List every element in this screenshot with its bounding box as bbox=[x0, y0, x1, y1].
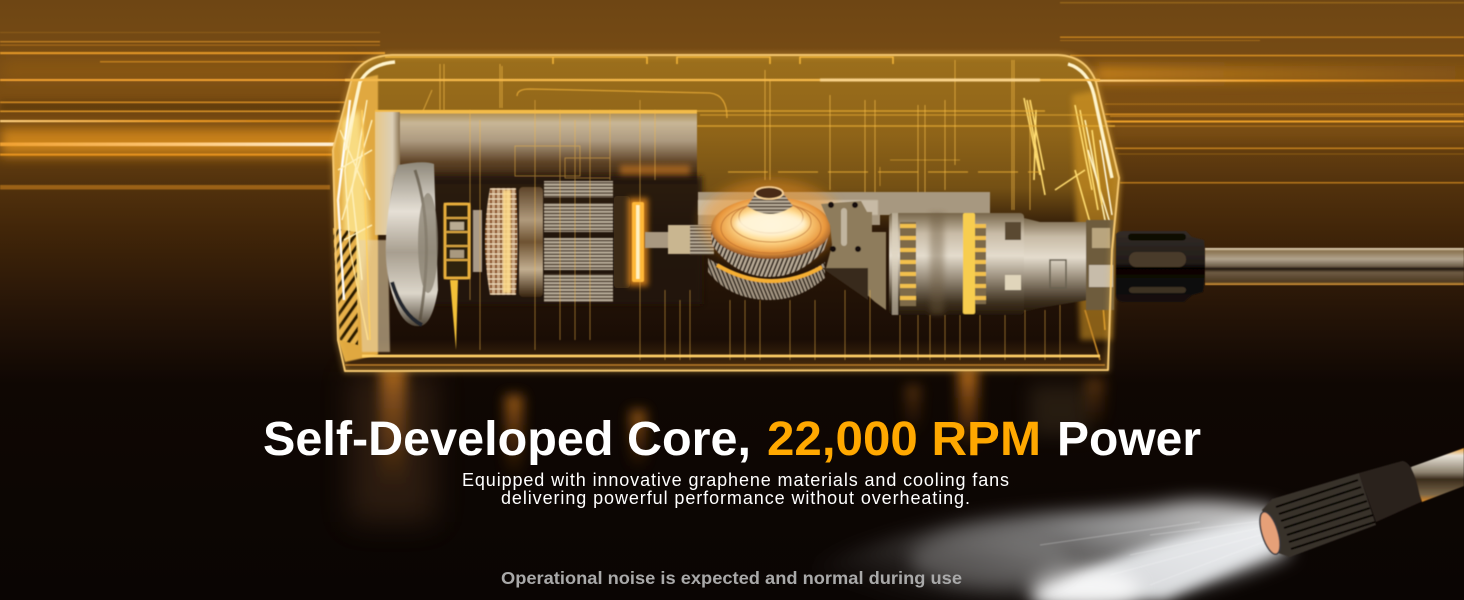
rear cylinder behind gearbox bbox=[698, 192, 990, 225]
spray hot spot bbox=[1030, 568, 1140, 600]
nozzle rod bbox=[1411, 448, 1464, 502]
lower gear bbox=[708, 258, 825, 300]
left glow core bbox=[342, 110, 370, 320]
light streaks: left bbox=[0, 32, 385, 190]
commutator bbox=[485, 188, 518, 295]
title bbox=[263, 413, 1201, 466]
disc rings bbox=[721, 201, 821, 253]
gear disc bbox=[711, 197, 831, 259]
spray cloud bbox=[910, 532, 1070, 588]
nozzle collar bbox=[1359, 461, 1421, 522]
housing outline bbox=[333, 55, 1119, 371]
spray core bbox=[1030, 516, 1282, 600]
cylinder end cap bbox=[375, 112, 400, 235]
footnote: Operational noise is expected and normal during use bbox=[501, 568, 962, 588]
outer glow bbox=[701, 180, 841, 264]
front gears bbox=[1086, 220, 1114, 310]
yellow wedge below ring gear bbox=[450, 280, 458, 350]
spray streaks bbox=[1040, 520, 1274, 585]
right glass glow panel bbox=[1072, 90, 1119, 340]
rotor bbox=[544, 181, 613, 302]
subtitle: Equipped with innovative graphene materials and cooling fans bbox=[462, 470, 1009, 490]
nozzle orifice bbox=[1256, 510, 1284, 556]
cone opening bbox=[755, 187, 783, 199]
upper cylinder bbox=[375, 110, 697, 235]
rib grooves bbox=[1276, 480, 1375, 549]
housing glass fill bbox=[333, 55, 1119, 371]
dark motor bay bbox=[396, 176, 702, 304]
bevel gear bbox=[701, 180, 841, 300]
gear skirt bbox=[711, 232, 830, 277]
rotor collar bbox=[614, 196, 630, 288]
hex detail bbox=[1050, 260, 1066, 288]
nozzle ribbed knob bbox=[1262, 473, 1376, 557]
water spray bbox=[750, 501, 1290, 600]
left sparks strokes bbox=[338, 90, 372, 340]
title: Self-Developed Core, bbox=[263, 413, 751, 466]
front motor bbox=[889, 213, 1114, 315]
cylinder warm reflection bbox=[620, 165, 690, 175]
nozzle wand bbox=[1256, 448, 1464, 557]
title: Power bbox=[1057, 413, 1201, 466]
light streaks: right bbox=[1060, 2, 1464, 184]
wireframe vertical lines bbox=[420, 60, 1030, 215]
glow core bbox=[735, 212, 807, 236]
left glass glow panel bbox=[333, 75, 378, 362]
title: 22,000 RPM bbox=[767, 413, 1041, 466]
subtitle: delivering powerful performance without overheating. bbox=[501, 488, 970, 508]
glowing ring bbox=[628, 198, 648, 286]
rear cylinder highlight bbox=[698, 200, 878, 215]
translucent overlay lines bbox=[470, 100, 1060, 360]
bearing bbox=[519, 187, 543, 297]
device: transparent housing bbox=[333, 55, 1119, 371]
floor reflections bbox=[350, 368, 1105, 522]
wireframe horizontal lines bbox=[375, 57, 1115, 186]
glow ring bbox=[717, 265, 822, 281]
knob bbox=[1116, 231, 1205, 302]
cone bbox=[747, 192, 793, 214]
motor end section bbox=[1024, 218, 1088, 312]
drive shaft bbox=[645, 225, 714, 255]
lower left pale glass bbox=[358, 240, 390, 352]
subtitle bbox=[462, 470, 1009, 508]
motor ring gear bbox=[442, 202, 482, 280]
steel rod bbox=[1205, 248, 1464, 285]
left edge hatching bbox=[333, 228, 358, 345]
bracket bbox=[821, 201, 886, 310]
fan bbox=[386, 162, 438, 326]
right sparks strokes bbox=[1024, 98, 1112, 360]
